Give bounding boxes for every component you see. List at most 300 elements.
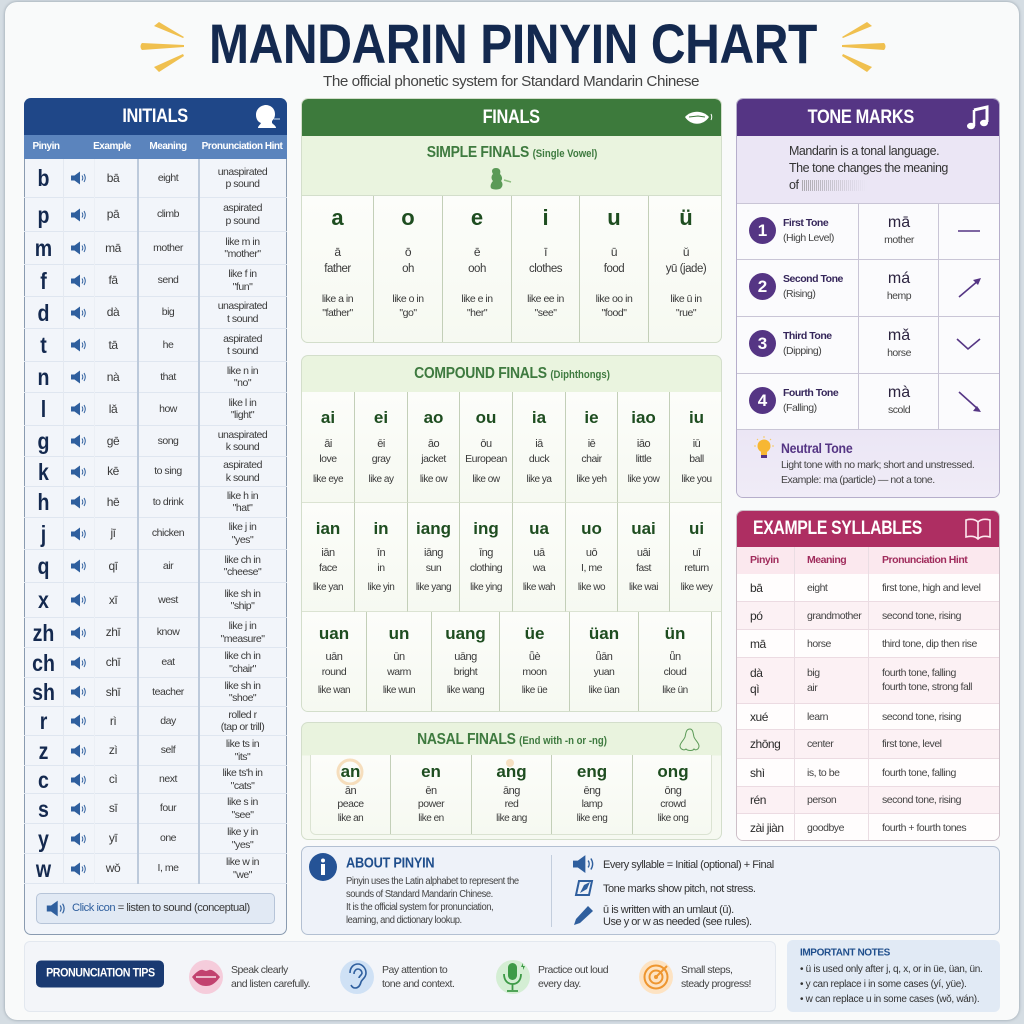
syllable row pó: pó bbox=[750, 608, 762, 622]
cell i: i bbox=[542, 205, 549, 230]
row x: x bbox=[38, 587, 49, 613]
compound row 1: European bbox=[465, 453, 507, 465]
cell ü: ǔ bbox=[683, 245, 689, 259]
syllable row pó bbox=[737, 602, 999, 630]
row zh: know bbox=[157, 626, 179, 638]
tip 3: every day. bbox=[538, 978, 581, 990]
row d: t sound bbox=[227, 312, 258, 324]
subtitle: The official phonetic system for Standard Mandarin Chinese bbox=[323, 73, 699, 90]
compound row 1: like ay bbox=[368, 474, 394, 485]
row k: k sound bbox=[226, 472, 259, 484]
compound row 1: like ow bbox=[472, 474, 500, 485]
row l: l bbox=[41, 396, 46, 422]
compound row 1: chair bbox=[581, 453, 602, 465]
example syllables heading bbox=[736, 511, 1000, 547]
row c: like ts'h in bbox=[222, 767, 262, 779]
tip 1 bbox=[231, 964, 310, 990]
row y: y bbox=[38, 826, 49, 852]
row g: g bbox=[38, 428, 49, 454]
compound row 2: uo bbox=[581, 519, 602, 538]
cell o bbox=[374, 196, 443, 344]
row j: j bbox=[41, 520, 46, 546]
cell an bbox=[311, 755, 391, 835]
row j: jī bbox=[110, 526, 116, 540]
compound row 3 bbox=[302, 612, 721, 711]
compound row 1: like you bbox=[681, 474, 712, 485]
cell ong: ōng bbox=[665, 785, 681, 797]
neutral text bbox=[781, 459, 974, 486]
row q bbox=[24, 550, 287, 583]
tone 4: mà bbox=[888, 384, 910, 401]
neutral heading: Neutral Tone bbox=[781, 440, 852, 456]
cell o: "go" bbox=[399, 307, 417, 319]
cell e: "her" bbox=[467, 307, 487, 319]
panel: important notes bbox=[787, 940, 1000, 1012]
notes list bbox=[800, 964, 983, 1005]
cell eng bbox=[552, 755, 633, 835]
compound row 3: ǖān bbox=[596, 651, 612, 663]
syllable row xué: second tone, rising bbox=[882, 710, 961, 722]
compound row 2: I, me bbox=[581, 562, 602, 574]
syllable row pó: grandmother bbox=[807, 610, 861, 622]
cell ong: crowd bbox=[660, 798, 686, 810]
row m: mother bbox=[153, 242, 183, 254]
cell a bbox=[302, 196, 374, 344]
row l: lǎ bbox=[109, 402, 117, 416]
compound row 2: like wai bbox=[629, 582, 658, 593]
syllable row zàijiàn: goodbye bbox=[807, 822, 844, 834]
tone 4: 4 bbox=[758, 391, 767, 410]
cell en: power bbox=[418, 798, 444, 810]
cell an: an bbox=[341, 762, 360, 781]
row k: k bbox=[38, 458, 49, 484]
syllable row xué: learn bbox=[807, 710, 828, 722]
row t bbox=[24, 329, 287, 362]
syllable row rén: rén bbox=[750, 793, 766, 807]
row b: unaspirated bbox=[218, 166, 267, 178]
compound row 3: ūn bbox=[393, 651, 405, 663]
highlight: orange smudges bbox=[336, 758, 514, 785]
syllable row dà / qì: fourth tone, strong fall bbox=[882, 681, 972, 693]
cell o: ō bbox=[405, 245, 411, 259]
nasal finals heading: NASAL FINALS (End with -n or -ng) bbox=[417, 731, 607, 748]
cell o: like o in bbox=[392, 293, 424, 305]
syllable row shì bbox=[737, 759, 999, 787]
compound row 1: gray bbox=[372, 453, 390, 465]
row c: next bbox=[159, 773, 177, 785]
cell ong bbox=[633, 755, 713, 835]
cell i bbox=[512, 196, 580, 344]
compound row 1: ie bbox=[584, 408, 599, 427]
compound row 2: ing bbox=[473, 519, 499, 538]
compound row 3: uang bbox=[445, 624, 486, 643]
icon: right rays bbox=[842, 22, 886, 72]
row d bbox=[24, 297, 287, 329]
notes list: • ü is used only after j, q, x, or in üe, üan, ün. bbox=[800, 964, 983, 975]
row c bbox=[24, 766, 287, 794]
intro text bbox=[789, 144, 948, 192]
example syllables heading: EXAMPLE SYLLABLES bbox=[753, 518, 922, 539]
row d: big bbox=[162, 306, 174, 318]
row y: "yes" bbox=[232, 838, 253, 850]
intro text: Mandarin is a tonal language. bbox=[789, 144, 939, 158]
tip 1: Speak clearly bbox=[231, 964, 288, 976]
syllable row zàijiàn bbox=[737, 814, 999, 841]
column headers: Pronunciation Hint bbox=[202, 141, 282, 152]
compound row 1: like eye bbox=[313, 474, 343, 485]
row t: t bbox=[40, 332, 47, 358]
syllable row dà / qì: big bbox=[807, 667, 820, 679]
compound row 3: ǖn bbox=[669, 651, 681, 663]
cell e bbox=[443, 196, 512, 344]
tip 2: tone and context. bbox=[382, 978, 454, 990]
syllable row rén bbox=[737, 787, 999, 814]
row b: b bbox=[38, 165, 49, 191]
tone 3: 3 bbox=[758, 334, 767, 353]
column headers bbox=[24, 135, 287, 159]
tone 2: 2 bbox=[758, 277, 767, 296]
compound row 1: ball bbox=[689, 453, 704, 465]
column headers: Meaning bbox=[149, 141, 187, 152]
compound row 1: like yow bbox=[628, 474, 659, 485]
cell i: ī bbox=[544, 245, 547, 259]
row n: like n in bbox=[227, 364, 258, 376]
panel: example syllables bbox=[736, 510, 1000, 841]
compound row 3: like ün bbox=[662, 685, 688, 696]
compound row 3: moon bbox=[522, 666, 547, 678]
about heading: ABOUT PINYIN bbox=[346, 854, 434, 872]
compound row 3: uān bbox=[326, 651, 342, 663]
cell e: ooh bbox=[468, 263, 486, 275]
compound row 1: iā bbox=[535, 438, 543, 450]
row s: like s in bbox=[227, 796, 258, 808]
tone 4: scold bbox=[888, 404, 910, 416]
compound row 3: un bbox=[389, 624, 409, 643]
compound row 1: ia bbox=[532, 408, 546, 427]
compound row 2: clothing bbox=[470, 562, 502, 574]
cell e: e bbox=[471, 205, 483, 230]
row p bbox=[24, 198, 287, 232]
panel: about pinyin bbox=[301, 846, 1000, 935]
compound row 1: like yeh bbox=[576, 474, 607, 485]
row ch: like ch in bbox=[224, 650, 261, 662]
compound row 2: uā bbox=[533, 547, 545, 559]
initials rows bbox=[24, 159, 287, 884]
syllable row zhōng: first tone, level bbox=[882, 738, 942, 750]
compound row 2: uō bbox=[586, 547, 597, 559]
tip 4 bbox=[681, 964, 751, 990]
fact 1: Every syllable = Initial (optional) + Final bbox=[603, 859, 774, 871]
row x bbox=[24, 583, 287, 618]
compound row 2: like wah bbox=[523, 582, 555, 593]
compound row 2: wa bbox=[533, 562, 545, 574]
syllable row dà / qì: dà bbox=[750, 666, 762, 680]
tip 1: and listen carefully. bbox=[231, 978, 310, 990]
cell a: "father" bbox=[322, 307, 353, 319]
tone 3 bbox=[737, 317, 1000, 374]
cell ü: ü bbox=[679, 205, 693, 230]
cell ü bbox=[649, 196, 723, 344]
row r bbox=[24, 707, 287, 736]
row z: "its" bbox=[235, 750, 250, 762]
compound row 2: return bbox=[684, 562, 709, 574]
row b: p sound bbox=[225, 178, 260, 190]
tip 3: Practice out loud bbox=[538, 964, 608, 976]
panel: pronunciation tips bbox=[24, 941, 776, 1012]
compound row 2: iāng bbox=[424, 547, 443, 559]
row f: f bbox=[40, 268, 47, 294]
row sh: shī bbox=[106, 685, 120, 699]
panel: tone marks bbox=[736, 98, 1000, 498]
tone 3: (Dipping) bbox=[783, 345, 821, 357]
compound row 2: ian bbox=[316, 519, 340, 538]
row ch: eat bbox=[161, 656, 175, 668]
compound row 1: like ow bbox=[420, 474, 447, 485]
syllable row mā: horse bbox=[807, 638, 831, 650]
initials heading: INITIALS bbox=[123, 106, 188, 127]
cell ang: like ang bbox=[496, 813, 527, 824]
row m: m bbox=[35, 235, 52, 261]
row m: "mother" bbox=[224, 248, 261, 260]
compound row 2: like wo bbox=[578, 582, 605, 593]
cell a: ā bbox=[334, 245, 341, 259]
row c: c bbox=[38, 766, 49, 792]
row ch: ch bbox=[32, 650, 55, 676]
table header: Pinyin bbox=[750, 554, 779, 566]
row q: like ch in bbox=[224, 554, 261, 566]
row sh: teacher bbox=[152, 686, 184, 698]
compound row 2: uī bbox=[692, 547, 701, 559]
cell u: food bbox=[604, 263, 624, 275]
cell e: like e in bbox=[461, 293, 493, 305]
cell ü: yū (jade) bbox=[666, 263, 706, 275]
row l: how bbox=[159, 403, 177, 415]
row r: (tap or trill) bbox=[221, 721, 264, 733]
compound row 2: uai bbox=[631, 519, 656, 538]
row ch bbox=[24, 648, 287, 678]
tone marks heading: TONE MARKS bbox=[808, 107, 914, 128]
tone 4: (Falling) bbox=[783, 402, 817, 414]
syllable row zhōng: center bbox=[807, 738, 833, 750]
tip 2 bbox=[382, 964, 454, 990]
row x: "ship" bbox=[231, 600, 254, 612]
fact 3: Use y or w as needed (see rules). bbox=[603, 916, 752, 928]
row k: kē bbox=[107, 464, 119, 478]
about text: It is the official system for pronunciation, bbox=[346, 902, 493, 913]
compound row 1: iāo bbox=[637, 438, 650, 450]
compound row 3: uan bbox=[319, 624, 349, 643]
compound row 3: like wang bbox=[447, 685, 484, 696]
row t: aspirated bbox=[223, 332, 262, 344]
row w: like w in bbox=[226, 856, 259, 868]
tone 1: mā bbox=[888, 214, 910, 231]
syllable row mā bbox=[737, 630, 999, 658]
intro text: The tone changes the meaning bbox=[789, 161, 948, 175]
syllable row shì: shì bbox=[750, 766, 765, 780]
row c: "cats" bbox=[231, 780, 254, 792]
compound row 1: ōu bbox=[480, 438, 492, 450]
compound row 2: ua bbox=[529, 519, 549, 538]
cell i: like ee in bbox=[527, 293, 564, 305]
syllable row zàijiàn: fourth + fourth tones bbox=[882, 822, 966, 834]
row t: tā bbox=[108, 338, 118, 352]
panel: nasal finals bbox=[301, 722, 722, 840]
neutral tone bbox=[737, 430, 1000, 498]
row g: gē bbox=[107, 434, 119, 448]
row x: xī bbox=[109, 593, 117, 607]
icon: info bbox=[309, 853, 337, 881]
row p: aspirated bbox=[223, 202, 262, 214]
row y: like y in bbox=[227, 826, 258, 838]
legend: click icon bbox=[36, 893, 275, 924]
row q: qī bbox=[108, 559, 118, 573]
row s: four bbox=[160, 802, 176, 814]
compound row 2: face bbox=[319, 562, 337, 574]
row n: that bbox=[160, 371, 176, 383]
badge: pronunciation tips: PRONUNCIATION TIPS bbox=[46, 968, 154, 980]
tone 4: Fourth Tone bbox=[783, 387, 838, 399]
compound row 3: üan bbox=[589, 624, 619, 643]
compound row 1: ai bbox=[321, 408, 335, 427]
row t: he bbox=[163, 339, 173, 351]
compound row 2 bbox=[302, 503, 721, 612]
panel: finals header and simple finals bbox=[301, 98, 722, 343]
compound row 1: ou bbox=[476, 408, 496, 427]
row j bbox=[24, 518, 287, 550]
compound row 2: uāi bbox=[637, 547, 650, 559]
row h: h bbox=[38, 489, 49, 515]
row f: fā bbox=[108, 273, 118, 287]
icon: tone mark bbox=[574, 880, 594, 896]
row h: to drink bbox=[153, 496, 183, 508]
compound row 2: in bbox=[373, 519, 389, 538]
cell e: ē bbox=[474, 245, 480, 259]
table header: Pronunciation Hint bbox=[882, 554, 967, 566]
compound row 2: ui bbox=[689, 519, 704, 538]
row q: q bbox=[38, 553, 49, 579]
row g: k sound bbox=[226, 441, 259, 453]
row z: zì bbox=[109, 743, 117, 757]
cell a: father bbox=[324, 263, 351, 275]
row q: air bbox=[163, 560, 173, 572]
row w: I, me bbox=[158, 862, 178, 874]
icon: music note bbox=[967, 105, 988, 130]
row k bbox=[24, 457, 287, 487]
about text bbox=[346, 876, 519, 926]
row k: to sing bbox=[154, 465, 182, 477]
panel: compound finals bbox=[301, 355, 722, 712]
tone 1: mother bbox=[884, 234, 914, 246]
row zh bbox=[24, 618, 287, 648]
notes list: • w can replace u in some cases (wǒ, wán). bbox=[800, 994, 979, 1005]
cell ü: "rue" bbox=[676, 307, 696, 319]
row d: dà bbox=[107, 305, 119, 319]
compound row 2: like wey bbox=[681, 582, 712, 593]
compound row 1: duck bbox=[529, 453, 549, 465]
cell ü: like ū in bbox=[670, 293, 702, 305]
cell a: a bbox=[331, 205, 344, 230]
syllable row dà / qì: air bbox=[807, 682, 817, 694]
cell u bbox=[580, 196, 649, 344]
compound finals heading: COMPOUND FINALS (Diphthongs) bbox=[414, 365, 610, 382]
compound row 1: iu bbox=[689, 408, 704, 427]
row r: day bbox=[160, 715, 176, 727]
syllable row shì: fourth tone, falling bbox=[882, 766, 956, 778]
compound row 2: in bbox=[377, 562, 385, 574]
row x: like sh in bbox=[224, 588, 261, 600]
syllable row zhōng: zhōng bbox=[750, 737, 780, 751]
row n: "no" bbox=[234, 377, 251, 389]
tone 2: (Rising) bbox=[783, 288, 815, 300]
row p: p sound bbox=[225, 214, 260, 226]
compound row 3: like wan bbox=[318, 685, 350, 696]
finals heading: FINALS bbox=[483, 107, 540, 128]
row f bbox=[24, 265, 287, 297]
compound row 2: īng bbox=[479, 547, 493, 559]
tone 4 bbox=[737, 374, 1000, 430]
syllable row bā: bā bbox=[750, 580, 762, 594]
icon: nose bbox=[680, 728, 700, 751]
compound row 3: uāng bbox=[454, 651, 477, 663]
row j: "yes" bbox=[232, 534, 253, 546]
compound row 1: ei bbox=[374, 408, 388, 427]
compound row 1: āi bbox=[324, 438, 332, 450]
tone 1: 1 bbox=[758, 221, 767, 240]
tone 1: (High Level) bbox=[783, 232, 834, 244]
cell eng: lamp bbox=[582, 798, 602, 810]
cell an: ān bbox=[345, 785, 356, 797]
row w bbox=[24, 854, 287, 884]
compound row 2: iang bbox=[416, 519, 451, 538]
row q: "cheese" bbox=[224, 566, 261, 578]
cell u: ū bbox=[611, 245, 617, 259]
syllable row mā: mā bbox=[750, 636, 766, 650]
icon: bulb bbox=[754, 436, 774, 458]
panel: initials bbox=[24, 98, 287, 935]
row n bbox=[24, 362, 287, 393]
row b bbox=[24, 159, 287, 198]
tip 2: Pay attention to bbox=[382, 964, 447, 976]
notes heading: IMPORTANT NOTES bbox=[800, 948, 890, 958]
cell a: like a in bbox=[322, 293, 353, 305]
tone 1 bbox=[737, 204, 1000, 260]
compound row 3: ǖè bbox=[529, 651, 540, 663]
compound row 1: jacket bbox=[421, 453, 446, 465]
cell ang: ang bbox=[496, 762, 527, 781]
row z: self bbox=[161, 744, 175, 756]
cell ang: red bbox=[505, 798, 518, 810]
row f: "fun" bbox=[233, 280, 252, 292]
row sh: "shoe" bbox=[229, 692, 256, 704]
tone 1: First Tone bbox=[783, 217, 828, 229]
tone 2 bbox=[737, 260, 1000, 317]
row h: like h in bbox=[227, 490, 258, 502]
compound row 1: love bbox=[319, 453, 337, 465]
compound row 3: like wun bbox=[383, 685, 415, 696]
cell o: oh bbox=[402, 263, 414, 275]
compound row 1: little bbox=[636, 453, 651, 465]
row s: "see" bbox=[232, 808, 253, 820]
syllable row bā: eight bbox=[807, 582, 827, 594]
row z bbox=[24, 736, 287, 766]
row ch: "chair" bbox=[229, 662, 256, 674]
compound row 2: iān bbox=[321, 547, 335, 559]
cell u: u bbox=[607, 205, 621, 230]
table header: Meaning bbox=[807, 554, 846, 566]
row w: wǒ bbox=[106, 861, 120, 875]
neutral text: Example: ma (particle) — not a tone. bbox=[781, 474, 935, 486]
icon: book bbox=[965, 518, 991, 540]
